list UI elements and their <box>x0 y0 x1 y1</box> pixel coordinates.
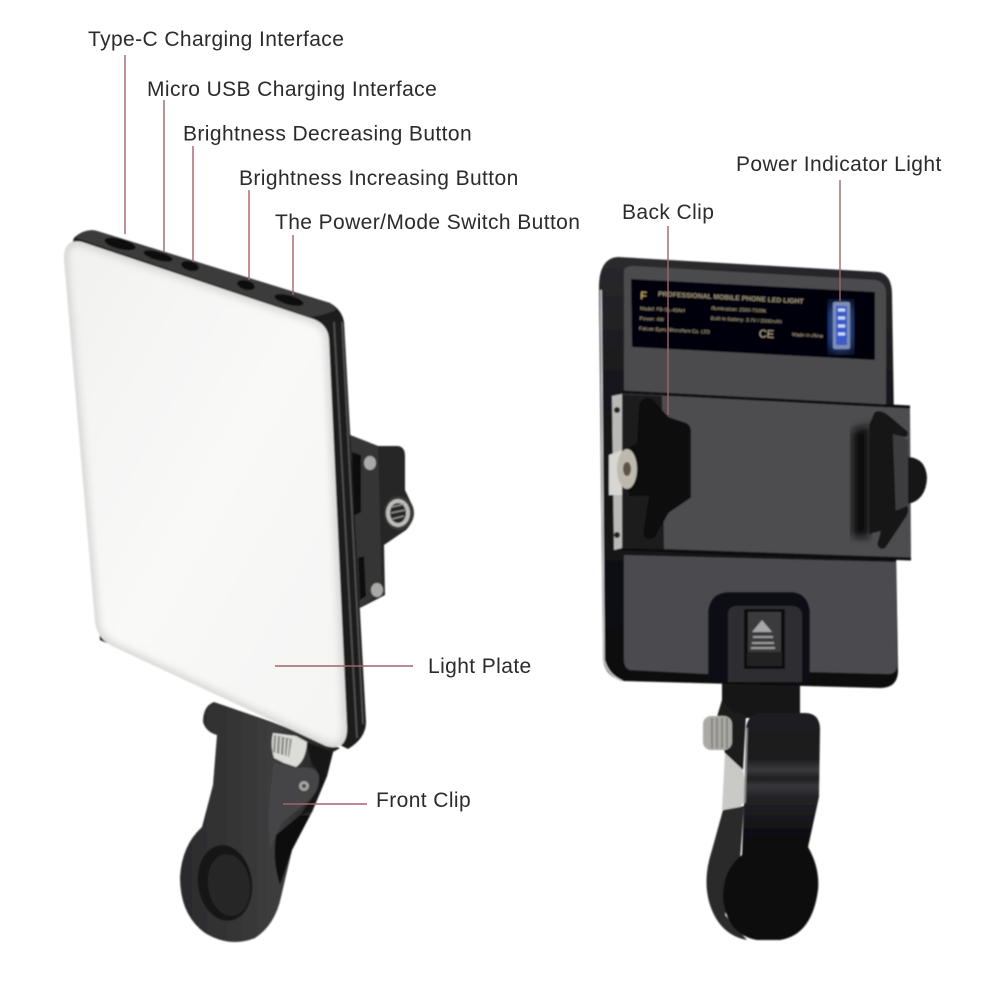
right phone clip <box>852 412 927 548</box>
left metal bracket <box>609 394 622 550</box>
label: brightness increasing: Brightness Increasing Button <box>239 167 519 190</box>
slider catch <box>708 592 810 682</box>
light body edge <box>70 230 366 749</box>
clip front face <box>723 713 820 940</box>
label: front clip: Front Clip <box>376 789 471 812</box>
ports and buttons <box>103 235 305 308</box>
shadow by left clip <box>622 394 664 549</box>
light plate <box>64 241 347 747</box>
product label: Made in china <box>792 332 823 340</box>
label: back clip: Back Clip <box>622 201 714 224</box>
metal knob <box>272 733 307 767</box>
product label <box>631 279 875 360</box>
power indicator light <box>830 302 852 350</box>
product label: Built-in Battery: 3.7V / 2000mAh <box>710 316 782 325</box>
product label: PROFESSIONAL MOBILE PHONE LED LIGHT <box>658 291 805 306</box>
label: light plate: Light Plate <box>428 655 532 678</box>
device: back view light <box>599 257 927 940</box>
front clip <box>180 702 340 942</box>
clip plate <box>622 393 911 558</box>
device: front view light panel <box>64 230 414 942</box>
label: power indicator light: Power Indicator Light <box>736 153 942 176</box>
product label: Power: 4W <box>639 316 664 323</box>
label: brightness decreasing: Brightness Decreasing Button <box>183 122 472 146</box>
product label: CE <box>759 328 774 341</box>
back clip <box>703 680 820 940</box>
product label: Falcon Eyes Shenzhen Co. LTD <box>639 326 711 336</box>
back body <box>599 257 898 688</box>
left phone clip <box>617 399 690 538</box>
callout lines <box>125 55 840 804</box>
knob <box>703 716 732 750</box>
textured back panel top <box>624 266 886 408</box>
label: power/mode: The Power/Mode Switch Button <box>275 211 580 234</box>
label: Micro USB: Micro USB Charging Interface <box>147 78 437 101</box>
product label: F <box>640 290 647 302</box>
side mount bracket <box>350 435 414 608</box>
product label: Model: FB-SL-40AH <box>640 306 685 314</box>
product label: Illumination: 2500-7500K <box>711 306 767 315</box>
textured back panel bottom <box>624 555 897 674</box>
label: Type-C: Type-C Charging Interface <box>88 28 344 51</box>
